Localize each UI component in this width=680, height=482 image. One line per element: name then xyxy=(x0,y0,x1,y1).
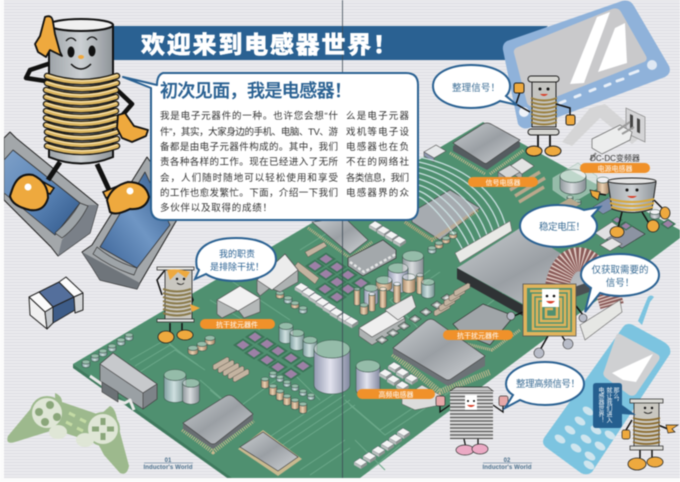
ribbon cable xyxy=(557,259,622,340)
orange label: power inductor xyxy=(580,163,650,173)
panel text left column: 责各种各样的工作。现在已经进入了无所 xyxy=(160,156,338,168)
character: signal inductor xyxy=(514,76,575,156)
panel text right column: 各类信息，我们 xyxy=(346,172,409,184)
grey resistor chain xyxy=(376,294,453,344)
ribbon wires xyxy=(419,157,506,252)
page number 02: Inductor's World xyxy=(482,465,532,471)
bubble: organise signals: 整理信号！ xyxy=(452,82,500,94)
right foot xyxy=(103,182,149,213)
white resistor row top xyxy=(369,221,406,247)
raised glove xyxy=(35,16,62,57)
panel text left column: 件”，其实，大家身边的手机、电脑、TV、游 xyxy=(160,126,338,138)
orange label: anti-noise right: 抗干扰元器件 xyxy=(457,331,499,340)
small capacitors row xyxy=(82,231,457,368)
face xyxy=(66,37,97,69)
bubble: get needed signals: 仅获取需要的 xyxy=(591,264,649,276)
panel text right column: 戏机等电子设 xyxy=(346,126,409,138)
title: 欢迎来到电感器世界！ xyxy=(141,31,397,59)
drum core left xyxy=(4,132,98,256)
small capacitor cluster xyxy=(261,371,315,414)
bubble: stabilise voltage: 稳定电压！ xyxy=(539,221,585,233)
character: noise suppression inductor xyxy=(157,267,200,343)
white boxes right of centre xyxy=(359,295,416,345)
title bar xyxy=(113,26,548,60)
chip inductor small xyxy=(29,277,83,329)
centre fold line xyxy=(342,0,344,478)
electrolytic capacitors centre xyxy=(354,251,434,315)
bubble: get needed signals: 信号！ xyxy=(606,277,634,289)
page number 01: 01 xyxy=(165,458,172,464)
bubble: stabilise voltage xyxy=(520,205,600,247)
panel text left column: 的工作也愈发繁忙。下面，介绍一下我们 xyxy=(160,187,338,199)
callout: enter the inductor world: 就让我们进入 xyxy=(605,386,612,423)
orange label: signal inductor: 信号电感器 xyxy=(486,178,520,187)
panel text right column: 电感器也在负 xyxy=(346,141,409,153)
character: power inductor xyxy=(590,178,670,238)
chip under top panel xyxy=(308,218,372,258)
D-sub connector xyxy=(90,353,157,410)
panel text left column: 会，人们随时随地可以轻松使用和享受 xyxy=(160,172,338,184)
teal tall capacitors xyxy=(164,322,380,404)
callout: enter the inductor world xyxy=(593,383,636,428)
panel text right column xyxy=(346,110,409,199)
power section components xyxy=(548,163,676,251)
small connector components xyxy=(424,145,545,202)
character: high-frequency inductor xyxy=(436,387,508,455)
large black chip xyxy=(457,228,600,316)
panel text left column: 多伙伴以及取得的成绩！ xyxy=(160,202,272,214)
module with ridges xyxy=(348,240,396,276)
orange label: high-frequency inductor: 高频电感器 xyxy=(378,390,414,399)
bubble: get needed signals xyxy=(581,254,659,312)
heat fins left xyxy=(213,357,249,382)
white inductor boxes xyxy=(217,254,298,318)
panel text right column: 电感器界的众 xyxy=(346,187,409,199)
intro speech panel xyxy=(123,73,418,220)
panel text left column xyxy=(160,110,338,214)
bubble: organise signals xyxy=(433,65,517,108)
callout: enter the inductor world: 那么， xyxy=(612,386,619,405)
big QFP chip xyxy=(183,395,253,451)
drum core right xyxy=(82,157,180,289)
page number 01: Inductor's World xyxy=(144,465,193,471)
page number 02 xyxy=(482,458,532,471)
page left margin xyxy=(0,0,4,482)
main inductor character xyxy=(10,16,149,213)
character: guide inductor xyxy=(622,399,678,470)
DC-DC converter caption: DC-DC变频器 xyxy=(590,153,640,163)
white resistor row long xyxy=(295,283,358,328)
board traces xyxy=(130,200,520,475)
orange label: anti-noise left xyxy=(200,319,275,329)
purple ICs xyxy=(233,252,371,380)
top chip xyxy=(450,123,524,174)
mobile phone illustration xyxy=(543,296,670,474)
wall socket and DC-DC plug xyxy=(590,108,645,160)
panel text right column: 么是电子元器 xyxy=(346,110,409,122)
circuit board xyxy=(73,122,680,480)
page bottom margin xyxy=(0,478,680,482)
page number 02: 02 xyxy=(504,458,511,464)
callout: enter the inductor world: 电感器世界！ xyxy=(597,386,604,423)
orange label: anti-noise right xyxy=(443,330,513,340)
panel text right column: 不在的网络社 xyxy=(346,156,409,168)
orange label: power inductor: 电源电感器 xyxy=(598,164,632,173)
panel text left column: 我是电子元器件的一种。也许您会想“什 xyxy=(160,110,338,122)
hand on hip xyxy=(117,113,148,142)
bubble: high-frequency signals xyxy=(505,362,584,408)
big chip lower right xyxy=(393,319,490,392)
coil xyxy=(46,75,117,152)
orange label: signal inductor xyxy=(468,177,538,187)
tan fin parts xyxy=(294,242,327,284)
panel heading: 初次见面，我是电感器！ xyxy=(160,81,352,101)
left foot xyxy=(10,175,54,210)
page number 01 xyxy=(144,458,193,471)
white header connector xyxy=(455,221,512,263)
orange label: anti-noise left: 抗干扰元器件 xyxy=(216,320,258,329)
character: spiral anti-noise inductor xyxy=(507,284,587,358)
orange label: high-frequency inductor xyxy=(357,389,435,399)
ridged module lower xyxy=(453,304,520,350)
inner chip behind panel xyxy=(405,190,480,240)
bubble: my duty: 我的职责 xyxy=(219,248,255,259)
white parts near high-frequency label xyxy=(354,362,440,469)
monitor illustration xyxy=(503,1,670,146)
bubble: my duty xyxy=(195,238,276,281)
bubble: my duty: 是排除干扰！ xyxy=(210,261,264,272)
heat fins right xyxy=(434,283,470,316)
panel text left column: 备都是由电子元器件构成的。其中，我们 xyxy=(160,141,338,153)
small flat chip xyxy=(238,430,302,476)
gamepad icon xyxy=(7,393,129,474)
bubble: high-frequency signals: 整理高频信号！ xyxy=(516,378,580,390)
